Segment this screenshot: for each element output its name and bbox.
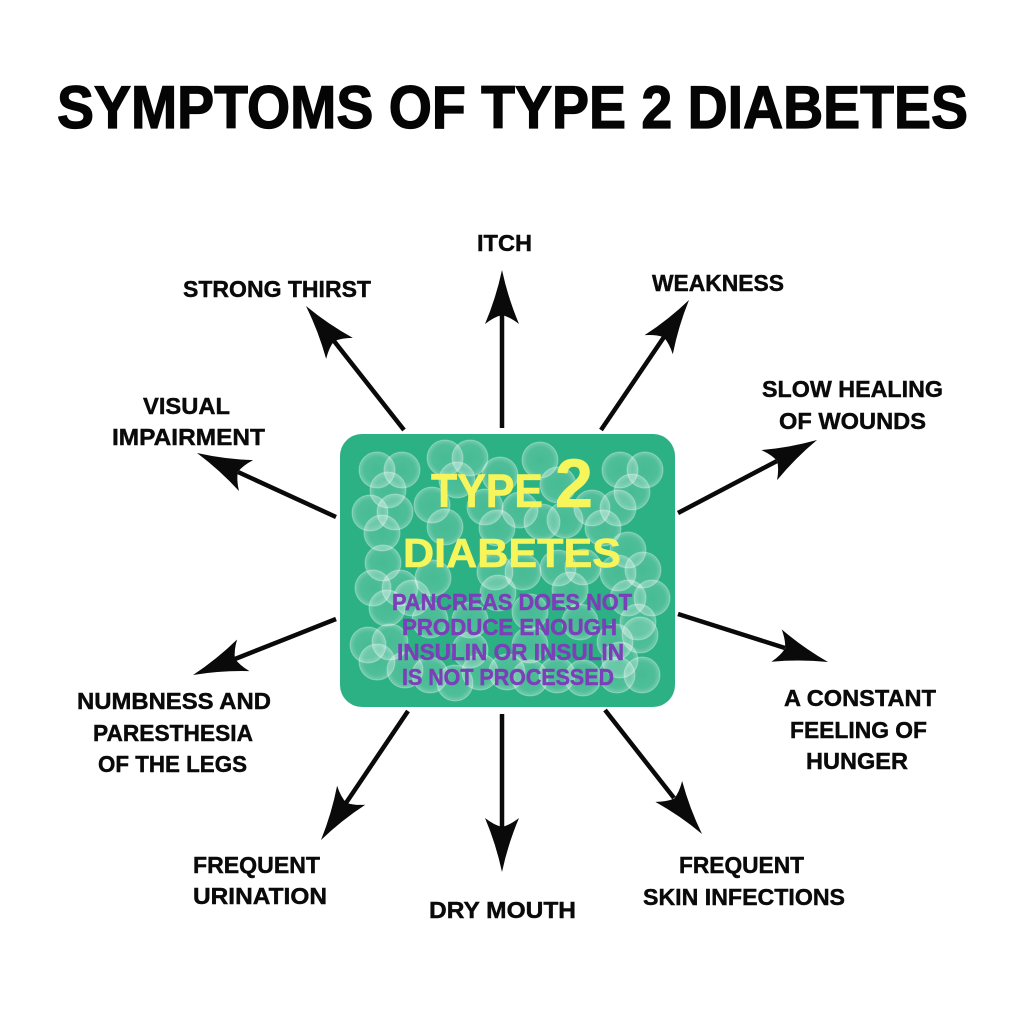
label: numbness and paresthesia of the legs: PARESTHESIA: [93, 720, 253, 746]
label: frequent urination: FREQUENT: [193, 852, 321, 878]
label: a constant feeling of hunger: FEELING OF: [790, 717, 927, 743]
description: IS NOT PROCESSED: [402, 664, 614, 690]
arrow: itch: [485, 270, 519, 428]
label: numbness and paresthesia of the legs: NUMBNESS AND: [77, 688, 271, 714]
arrow: visual impairment: [190, 438, 336, 517]
label: numbness and paresthesia of the legs: OF THE LEGS: [98, 751, 247, 777]
label: numbness and paresthesia of the legs: [77, 688, 271, 777]
label: dry mouth: DRY MOUTH: [429, 897, 576, 923]
label: weakness: WEAKNESS: [652, 270, 784, 296]
label: frequent skin infections: FREQUENT: [679, 852, 805, 878]
arrow: hunger: [678, 614, 833, 678]
arrow: slow healing: [678, 425, 825, 513]
label: a constant feeling of hunger: [784, 685, 937, 774]
label: visual impairment: IMPAIRMENT: [112, 424, 266, 450]
arrow: frequent urination: [307, 711, 408, 850]
arrow: numbness: [187, 619, 336, 691]
label: slow healing of wounds: [762, 376, 943, 434]
label: frequent urination: [193, 852, 327, 909]
label: frequent urination: URINATION: [193, 883, 327, 909]
label: visual impairment: VISUAL: [143, 393, 230, 419]
description: PANCREAS DOES NOT: [392, 589, 633, 615]
title: SYMPTOMS OF TYPE 2 DIABETES: [57, 74, 968, 141]
heading: type 2: 2: [555, 445, 593, 522]
description: INSULIN OR INSULIN: [397, 639, 624, 665]
arrow: strong thirst: [293, 295, 404, 430]
arrow: weakness: [601, 290, 703, 430]
description: PRODUCE ENOUGH: [402, 614, 617, 640]
heading: diabetes: DIABETES: [403, 530, 621, 576]
panel: type 2 diabetes: [340, 434, 675, 707]
label: strong thirst: STRONG THIRST: [183, 276, 372, 302]
description: [392, 589, 633, 690]
label: visual impairment: [112, 393, 266, 450]
bubbles: [350, 440, 670, 701]
arrow: dry mouth: [485, 714, 519, 872]
heading: type 2: [431, 445, 593, 522]
label: frequent skin infections: [643, 852, 845, 910]
label: itch: ITCH: [477, 230, 532, 256]
label: a constant feeling of hunger: HUNGER: [806, 748, 908, 774]
label: frequent skin infections: SKIN INFECTIONS: [643, 884, 845, 910]
label: slow healing of wounds: OF WOUNDS: [779, 408, 926, 434]
heading: type 2: TYPE: [431, 464, 543, 517]
label: slow healing of wounds: SLOW HEALING: [762, 376, 943, 402]
arrow: skin infections: [605, 710, 715, 844]
label: a constant feeling of hunger: A CONSTANT: [784, 685, 937, 711]
